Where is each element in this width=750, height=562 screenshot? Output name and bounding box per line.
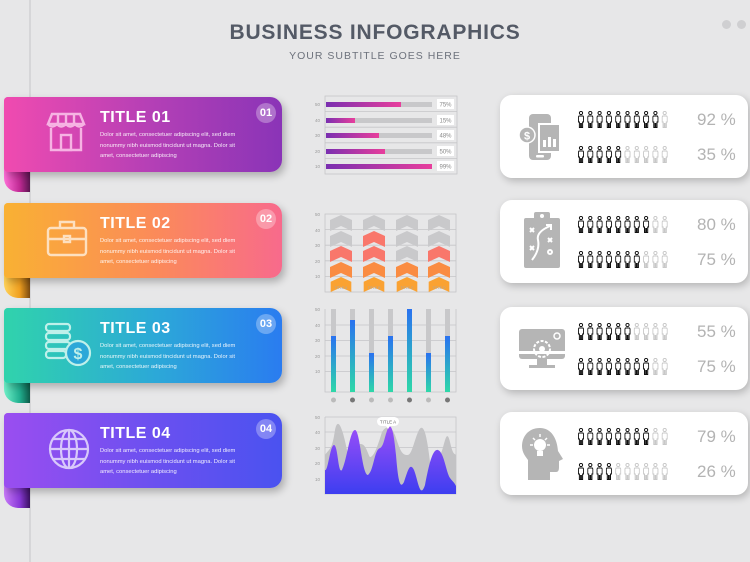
card: mobile finance stats — [500, 95, 748, 178]
panel: title 02: Dolor sit amet, consectetuer adipiscing elit, sed diem nonummy nibh euismod tincidunt ut magna. Dolor sit amet, consectetuer adipiscing — [100, 238, 235, 265]
left vertical guide line — [29, 0, 31, 562]
people row 80% — [578, 216, 668, 233]
icon: mobile finance: $ — [524, 130, 530, 142]
chart: chevron columns: 10 — [315, 274, 321, 279]
callout: title a — [377, 417, 399, 429]
chart: chevron columns: 20 — [315, 259, 321, 264]
decorative dots — [722, 20, 746, 29]
icon: globe — [48, 428, 90, 470]
panel: title 03: Dolor sit amet, consectetuer adipiscing elit, sed diem nonummy nibh euismod tincidunt ut magna. Dolor sit amet, consectetuer adipiscing — [100, 343, 235, 370]
card: mobile finance stats: 92 % — [697, 110, 736, 129]
icon: coins — [44, 322, 92, 366]
card: monitor settings stats: 75 % — [697, 357, 736, 376]
icon: coins: $ — [74, 346, 83, 363]
card: idea head stats: 79 % — [697, 427, 736, 446]
panel: title 02 — [3, 203, 289, 298]
panel: title 03: TITLE 03 — [100, 320, 171, 337]
panel: title 02: TITLE 02 — [100, 215, 171, 232]
chart: vertical bars: 30 — [315, 338, 321, 343]
chart: vertical bars — [315, 307, 456, 402]
card: monitor settings stats: 55 % — [697, 322, 736, 341]
icon: briefcase — [46, 220, 88, 256]
subtitle: YOUR SUBTITLE GOES HERE — [289, 50, 461, 62]
chart: chevron columns: TITLE C — [400, 286, 414, 290]
chart: horizontal progress bars: 50 — [315, 102, 321, 107]
chart: vertical bars: 10 — [315, 369, 321, 374]
chart: vertical bars: 20 — [315, 354, 321, 359]
people row 26% — [578, 463, 668, 480]
chart: area chart: 50 — [315, 415, 321, 420]
card: strategy stats: 80 % — [697, 215, 736, 234]
panel: title 01: TITLE 01 — [100, 109, 171, 126]
panel: title 02: 02 — [260, 213, 272, 225]
chart: chevron columns: TITLE B — [368, 286, 381, 290]
chart: chevron columns: 40 — [315, 228, 321, 233]
card: idea head stats — [500, 412, 748, 495]
chart: horizontal progress bars: 10 — [315, 164, 321, 169]
icon: mobile finance — [520, 114, 559, 160]
chart: area chart: 10 — [315, 477, 321, 482]
card: idea head stats: 26 % — [697, 462, 736, 481]
people row 79% — [578, 428, 668, 445]
chart: horizontal progress bars: 99% — [439, 164, 452, 170]
chart: chevron columns: TITLE D — [432, 286, 446, 290]
chart: horizontal progress bars — [315, 96, 458, 174]
chart: chevron columns — [315, 212, 456, 292]
card: strategy stats: 75 % — [697, 250, 736, 269]
chart: horizontal progress bars: 15% — [439, 118, 452, 124]
chart: area chart: 40 — [315, 430, 321, 435]
people row 75% — [578, 251, 668, 268]
chart: horizontal progress bars: 50% — [439, 150, 452, 156]
chart: vertical bars: 40 — [315, 323, 321, 328]
panel: title 03 — [3, 308, 289, 403]
chart: vertical bars: 50 — [315, 307, 321, 312]
people row 92% — [578, 111, 668, 128]
people row 75% — [578, 358, 668, 375]
people row 55% — [578, 323, 668, 340]
people row 35% — [578, 146, 668, 163]
panel: title 01 — [3, 97, 289, 192]
card: mobile finance stats: 35 % — [697, 145, 736, 164]
chart: horizontal progress bars: 20 — [315, 149, 321, 154]
icon: clipboard strategy — [524, 212, 560, 268]
chart: chevron columns: 30 — [315, 243, 321, 248]
card: strategy stats — [500, 200, 748, 283]
card: monitor settings stats — [500, 307, 748, 390]
panel: title 03: 03 — [260, 318, 272, 330]
chart: area chart: 30 — [315, 446, 321, 451]
panel: title 04: Dolor sit amet, consectetuer adipiscing elit, sed diem nonummy nibh euismod tincidunt ut magna. Dolor sit amet, consectetuer adipiscing — [100, 448, 235, 475]
panel: title 04 — [3, 413, 289, 508]
panel: title 04: 04 — [260, 423, 272, 435]
panel: title 04: TITLE 04 — [100, 425, 171, 442]
chart: horizontal progress bars: 30 — [315, 133, 321, 138]
chart: area chart: 20 — [315, 461, 321, 466]
icon: monitor gear — [519, 329, 565, 368]
chart: horizontal progress bars: 48% — [439, 134, 452, 140]
chart: chevron columns: TITLE A — [335, 286, 348, 290]
chart: horizontal progress bars: 75% — [439, 102, 452, 108]
chart: chevron columns: 50 — [315, 212, 321, 217]
icon: store — [46, 112, 86, 152]
chart: horizontal progress bars: 40 — [315, 118, 321, 123]
callout: title a: TITLE A — [380, 420, 396, 424]
title: BUSINESS INFOGRAPHICS — [230, 21, 520, 44]
chart: area chart — [315, 415, 456, 494]
panel: title 01: Dolor sit amet, consectetuer adipiscing elit, sed diem nonummy nibh euismod tincidunt ut magna. Dolor sit amet, consectetuer adipiscing — [100, 132, 235, 159]
icon: head with bulb — [522, 428, 563, 480]
panel: title 01: 01 — [260, 107, 272, 119]
